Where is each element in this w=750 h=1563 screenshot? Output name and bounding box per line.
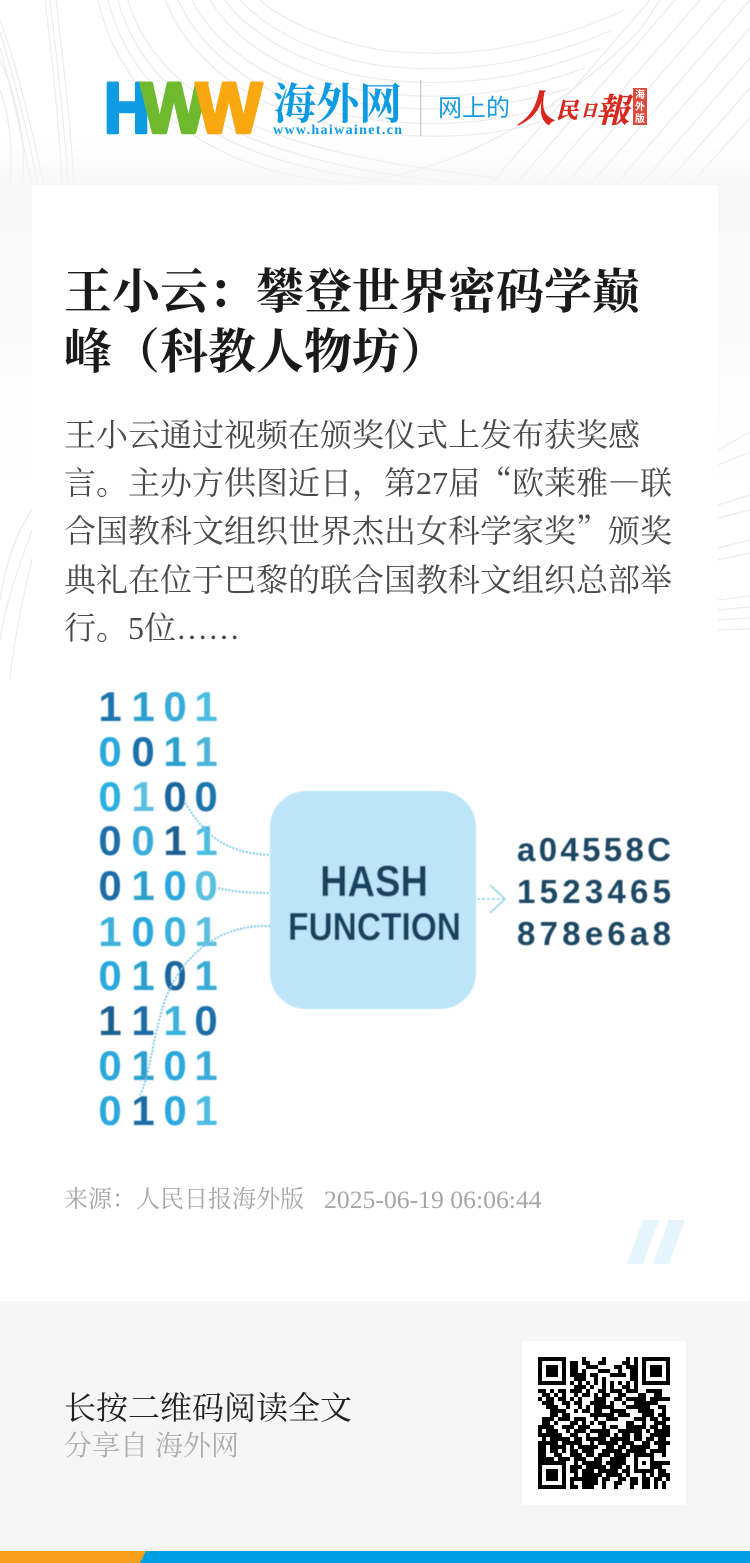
binary digit column: 0	[131, 728, 155, 775]
logo: 人民日报: 人	[517, 89, 555, 131]
logo divider	[420, 80, 421, 136]
body text	[64, 417, 672, 646]
binary digit column: 1	[131, 1087, 155, 1134]
background line pattern	[0, 0, 750, 680]
panel: footer	[0, 1301, 750, 1551]
body text: 合国教科文组织世界杰出女科学家奖”颁奖	[64, 506, 672, 552]
title: 王小云：攀登世界密码学巅	[64, 253, 640, 322]
binary digit column: 1	[194, 1087, 218, 1134]
binary digit column: 0	[98, 952, 122, 999]
logo wordmark: 海外网: 海外网	[273, 81, 402, 129]
binary digit column: 1	[131, 773, 155, 820]
logo header	[104, 70, 647, 148]
logo mark: HWW: W	[196, 70, 262, 148]
binary digit column: 0	[163, 773, 187, 820]
binary digit column	[98, 683, 218, 1134]
decorative slashes	[627, 1220, 685, 1264]
binary digit column: 0	[98, 1087, 122, 1134]
body text: 王小云通过视频在颁奖仪式上发布获奖感	[64, 417, 640, 453]
chart: hash function diagram	[98, 683, 671, 1134]
title	[64, 253, 640, 382]
source and date	[64, 1179, 542, 1214]
title: 峰（科教人物坊）	[64, 312, 448, 382]
binary digit column: 0	[131, 908, 155, 955]
binary digit column: 0	[131, 817, 155, 864]
binary digit column: 0	[163, 908, 187, 955]
hash function box: HASH	[320, 857, 428, 906]
hash output text: 1523465	[517, 873, 671, 910]
logo: 人民日报: 報	[596, 93, 634, 130]
body text: 言。主办方供图近日，第27届“欧莱雅—联	[64, 458, 672, 504]
binary digit column: 0	[194, 773, 218, 820]
binary digit column: 0	[98, 773, 122, 820]
logo: 人民日报: 民	[556, 98, 580, 123]
binary digit column: 1	[194, 1042, 218, 1089]
binary digit column: 0	[98, 862, 122, 909]
hash output text: a04558C	[517, 831, 671, 868]
dotted connectors	[140, 803, 270, 1095]
binary digit column: 0	[163, 683, 187, 730]
arrow	[477, 885, 505, 913]
binary digit column: 1	[194, 908, 218, 955]
logo stamp: 海外版: 版	[635, 112, 645, 125]
QR code	[522, 1341, 686, 1505]
binary digit column: 1	[131, 952, 155, 999]
hash output text	[517, 831, 671, 952]
logo: 人民日报: 日	[581, 103, 598, 120]
binary digit column: 0	[163, 862, 187, 909]
hash function box	[270, 791, 476, 1009]
binary digit column: 1	[194, 817, 218, 864]
source and date: 2025-06-19 06:06:44	[324, 1185, 542, 1214]
binary digit column: 0	[98, 1042, 122, 1089]
footer call to action: 长按二维码阅读全文	[64, 1390, 352, 1426]
binary digit column: 0	[163, 1042, 187, 1089]
binary digit column: 1	[98, 683, 122, 730]
binary digit column: 1	[194, 952, 218, 999]
binary digit column: 1	[194, 683, 218, 730]
binary digit column: 1	[194, 728, 218, 775]
card side shadow: right	[718, 185, 750, 490]
card side shadow: left	[0, 185, 32, 490]
logo stamp: 海外版: 海	[635, 88, 645, 101]
binary digit column: 0	[163, 1087, 187, 1134]
binary digit column: 1	[98, 908, 122, 955]
logo stamp: 海外版	[633, 88, 647, 125]
binary digit column: 0	[194, 997, 218, 1044]
binary digit column: 1	[131, 997, 155, 1044]
source and date: 来源：人民日报海外版	[64, 1179, 304, 1214]
footer share label: 分享自 海外网	[64, 1431, 239, 1462]
binary digit column: 0	[194, 862, 218, 909]
hash output text: 878e6a8	[517, 915, 671, 952]
hash function box: FUNCTION	[288, 906, 461, 949]
body text: 行。5位……	[64, 610, 240, 646]
body text: 典礼在位于巴黎的联合国教科文组织总部举	[64, 562, 672, 598]
binary digit column: 1	[98, 997, 122, 1044]
logo: 人民日报	[517, 89, 634, 131]
logo mark: HWW: W	[141, 70, 207, 148]
logo mark: HWW: H	[104, 70, 150, 148]
card top shadow band	[0, 140, 750, 185]
binary digit column: 0	[98, 817, 122, 864]
binary digit column: 1	[163, 817, 187, 864]
binary digit column: 0	[98, 728, 122, 775]
binary digit column: 1	[131, 683, 155, 730]
binary digit column: 1	[131, 1042, 155, 1089]
binary digit column: 1	[163, 997, 187, 1044]
binary digit column: 1	[131, 862, 155, 909]
logo stamp: 海外版: 外	[635, 100, 645, 113]
panel: white card	[32, 185, 718, 1301]
logo mark: HWW	[104, 70, 262, 148]
binary digit column: 0	[163, 952, 187, 999]
bottom colour bar	[0, 1551, 750, 1563]
logo wordmark: 海外网: www.haiwainet.cn	[273, 123, 402, 138]
binary digit column: 1	[163, 728, 187, 775]
label: 网上的: 网上的	[438, 95, 510, 122]
